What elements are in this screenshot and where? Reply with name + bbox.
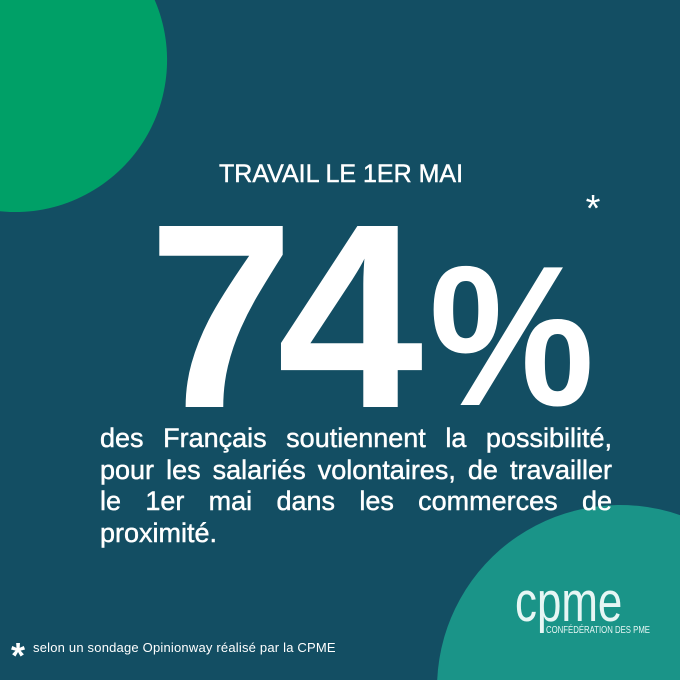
- footnote asterisk: *: [11, 635, 25, 676]
- description text: [100, 423, 612, 548]
- decorative circle: bottom right teal: [437, 505, 680, 680]
- description text: des Français soutiennent la possibilité,: [100, 423, 612, 453]
- description text: pour les salariés volontaires, de travailler: [100, 455, 612, 485]
- description text: le 1er mai dans les commerces de: [100, 486, 612, 516]
- asterisk note marker: *: [586, 188, 600, 230]
- big statistic: 74%: [148, 205, 594, 420]
- footnote text: selon un sondage Opinionway réalisé par la CPME: [33, 640, 336, 655]
- decorative circle: top left green: [0, 0, 167, 212]
- footnote: [11, 635, 336, 676]
- description text: proximité.: [100, 518, 217, 548]
- heading: TRAVAIL LE 1ER MAI: [219, 160, 463, 188]
